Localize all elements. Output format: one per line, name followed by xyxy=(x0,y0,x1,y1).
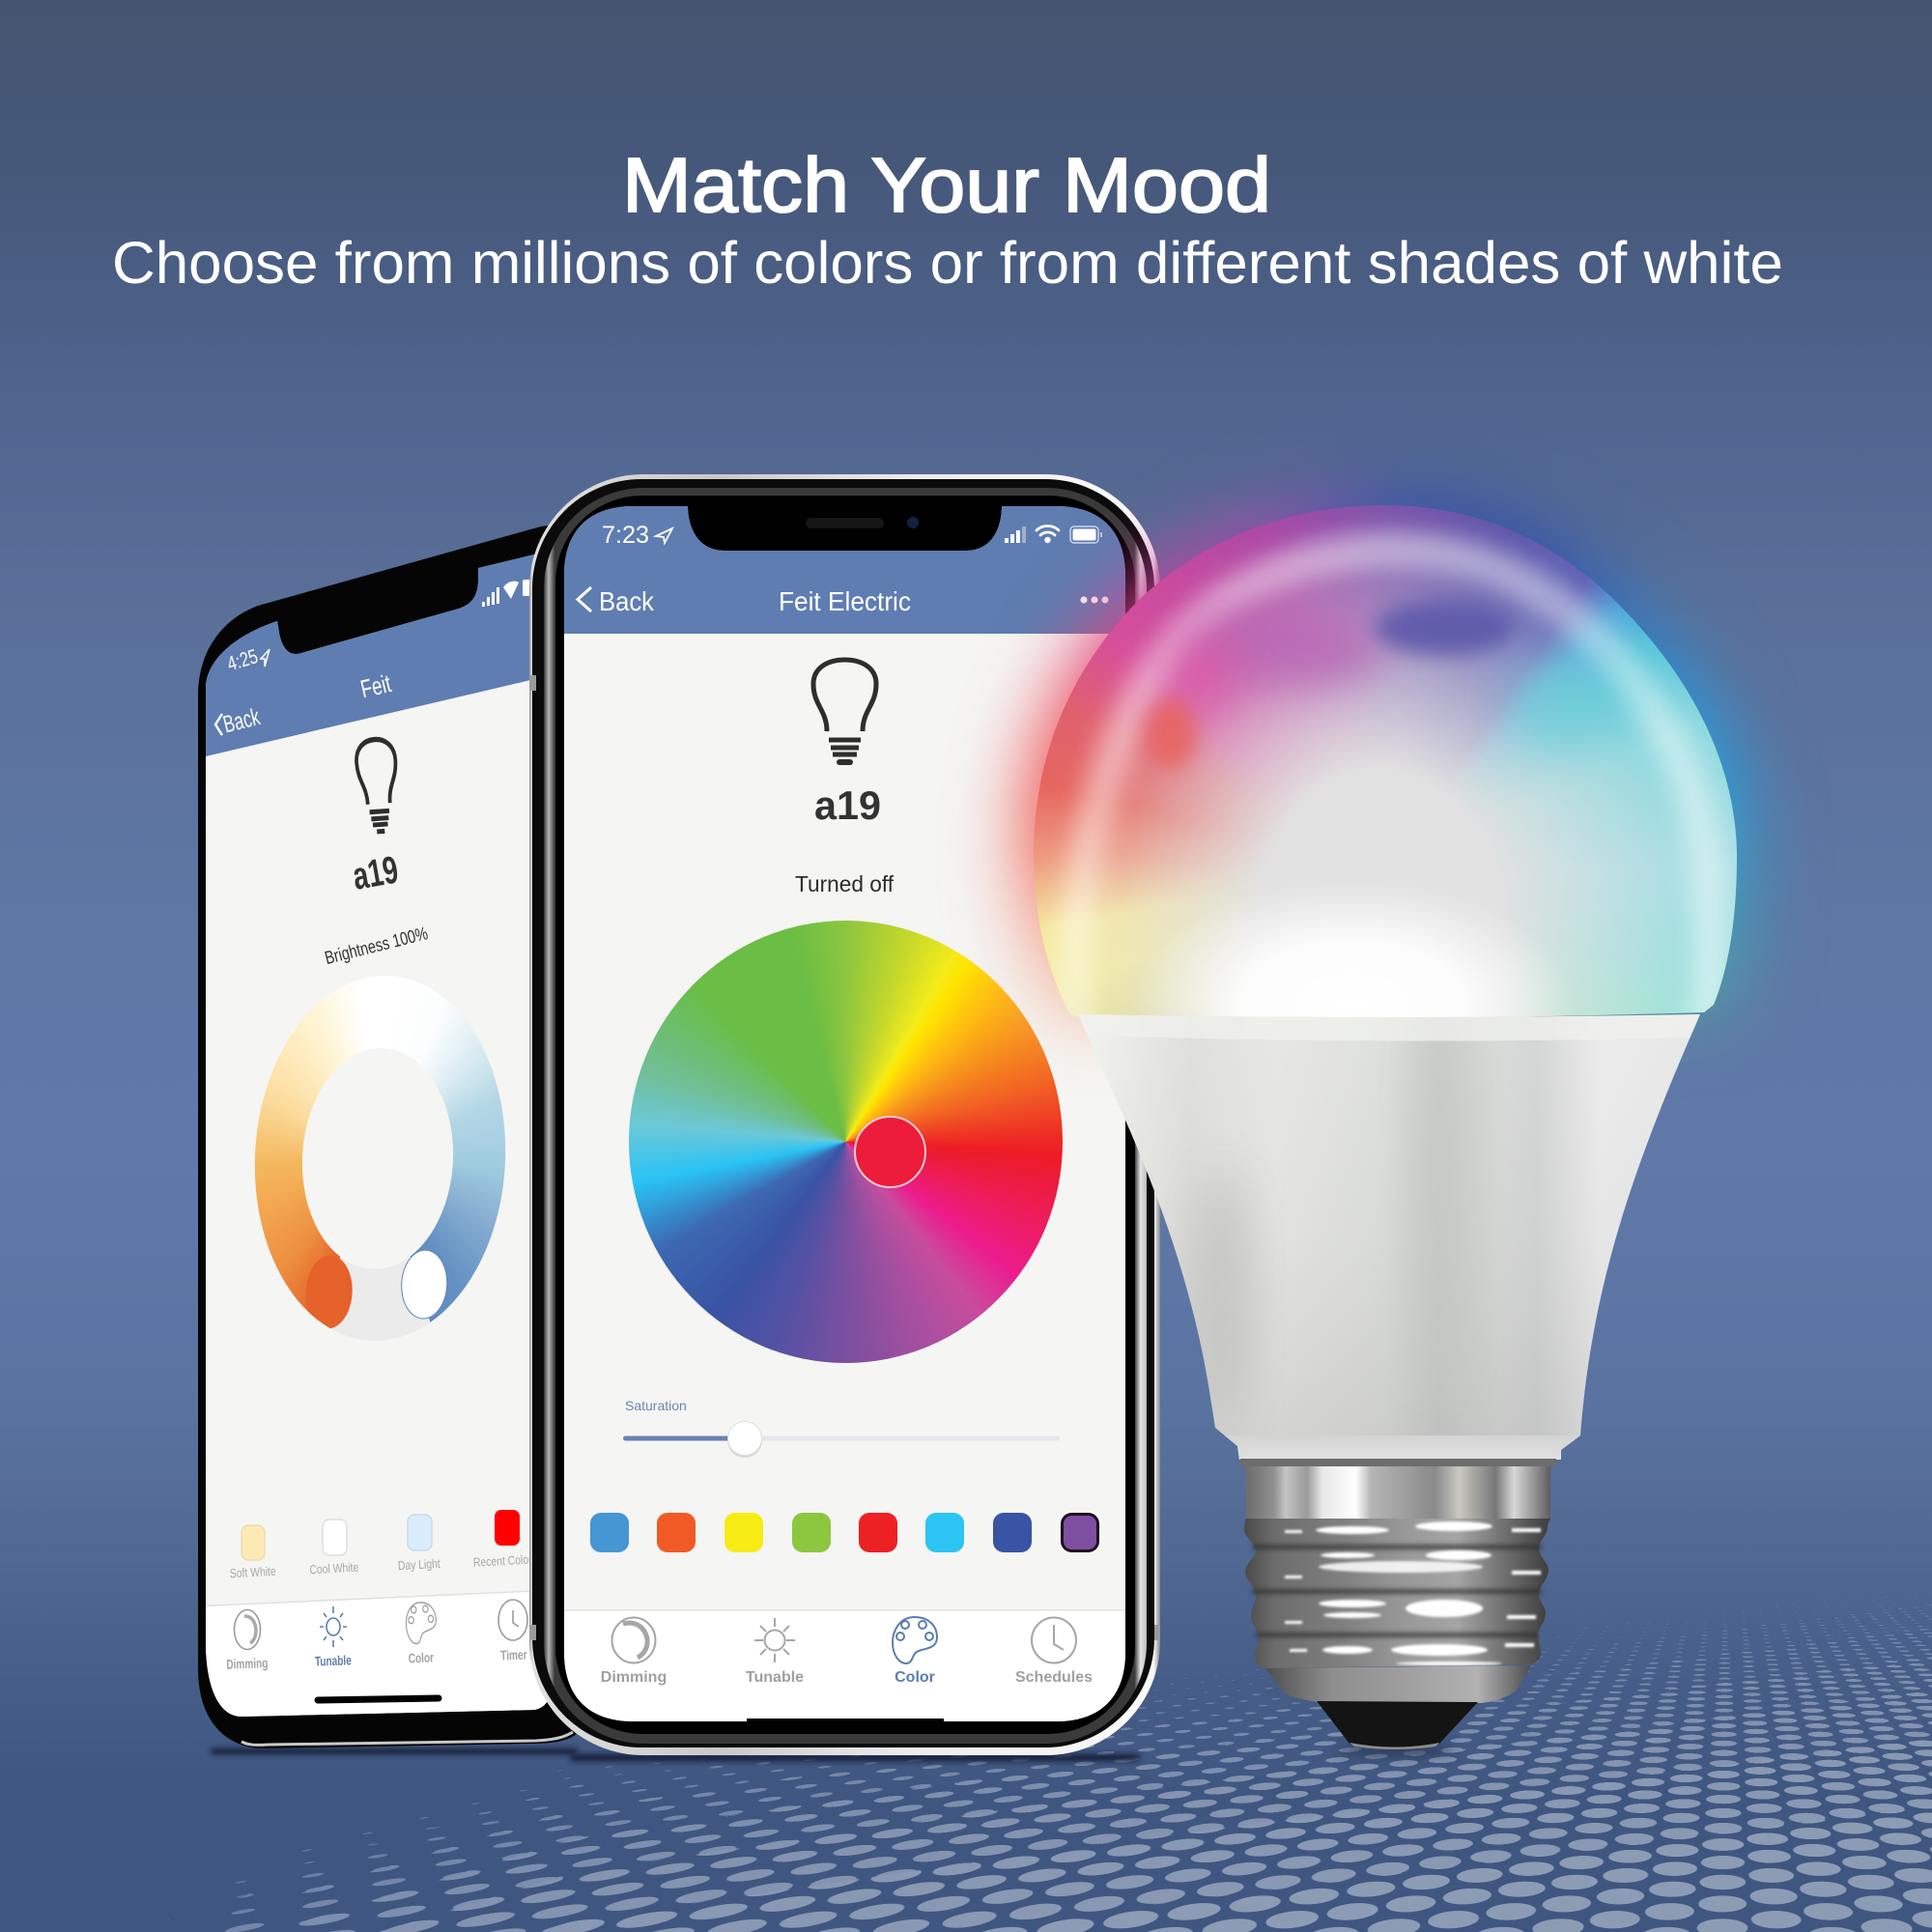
left back link: Back xyxy=(220,703,263,738)
thread grooves xyxy=(1252,1545,1542,1637)
tunable white ring xyxy=(245,969,515,1348)
tab icon: tunable xyxy=(754,1618,795,1662)
left preset labels: Day Light xyxy=(397,1557,441,1573)
ring handle xyxy=(399,1248,449,1321)
halftone dotted floor xyxy=(166,1589,1932,1932)
left phone body xyxy=(198,522,580,1748)
left preset labels xyxy=(230,1555,529,1578)
earpiece and camera xyxy=(806,517,919,528)
more dots xyxy=(1080,597,1109,603)
left tab labels xyxy=(226,1650,527,1671)
left home bar xyxy=(318,1698,439,1700)
left preset swatches xyxy=(242,1510,520,1560)
neck collar xyxy=(1072,1014,1705,1041)
screw base xyxy=(1240,1459,1556,1749)
phones artwork xyxy=(198,474,1160,1766)
tab icon: color xyxy=(893,1617,937,1663)
contact tip xyxy=(1317,1701,1478,1748)
left phone tab bar xyxy=(206,1592,547,1717)
left title: Feit xyxy=(357,668,394,703)
magenta patch xyxy=(1188,609,1381,686)
antenna bands xyxy=(530,675,1160,1640)
tab icon: schedules xyxy=(1032,1617,1076,1663)
left location arrow xyxy=(261,649,270,667)
neck shading xyxy=(1193,1169,1251,1420)
title: Match Your Mood xyxy=(622,142,1271,228)
left bulb icon xyxy=(355,738,400,833)
purple patch xyxy=(1375,601,1514,655)
saturation slider xyxy=(623,1422,1060,1458)
left status time: 4:25 xyxy=(224,644,261,675)
neck lower band xyxy=(1208,1435,1594,1464)
subtitle: Choose from millions of colors or from different shades of white xyxy=(112,230,1783,296)
base lower dome xyxy=(1265,1665,1531,1703)
status time: 7:23 xyxy=(602,522,649,549)
left device name: a19 xyxy=(350,849,402,898)
signal bars xyxy=(1005,526,1026,543)
left tab labels: Tunable xyxy=(315,1653,352,1669)
base collar xyxy=(1240,1459,1556,1467)
neck tone overlay xyxy=(1063,1014,1719,1461)
right phone screen xyxy=(564,506,1125,1721)
phone shadows xyxy=(211,1748,1140,1761)
base threads xyxy=(1244,1519,1550,1668)
back link xyxy=(578,586,655,616)
colour swatches xyxy=(590,1513,1097,1552)
base cylinder xyxy=(1246,1466,1550,1520)
thread highlights xyxy=(1285,1521,1541,1665)
tab labels: Schedules xyxy=(1015,1669,1093,1686)
left phone header xyxy=(206,554,535,756)
left speaker and camera xyxy=(351,590,427,622)
ring centre xyxy=(297,1044,459,1273)
saturation label: Saturation xyxy=(625,1398,687,1413)
battery icon xyxy=(1070,526,1102,543)
tab labels: Color xyxy=(895,1669,935,1686)
left tab labels: Color xyxy=(408,1650,434,1666)
pink patch xyxy=(1170,636,1236,717)
right phone header xyxy=(564,506,1125,634)
warm end cap xyxy=(304,1254,355,1330)
left preset labels: Soft White xyxy=(229,1565,277,1581)
right phone tab bar xyxy=(564,1609,1125,1721)
left chevron xyxy=(215,714,222,735)
tab labels xyxy=(601,1669,1093,1686)
cyan patch xyxy=(1507,657,1613,744)
bulb icon xyxy=(813,660,876,762)
header title: Feit Electric xyxy=(779,586,911,616)
left tab labels: Timer xyxy=(500,1647,527,1663)
back link: Back xyxy=(599,586,655,616)
left phone rim highlight xyxy=(242,1732,573,1745)
colour wheel xyxy=(629,921,1063,1363)
globe light patches xyxy=(1074,551,1711,1043)
location arrow xyxy=(656,528,672,543)
left tab labels: Dimming xyxy=(226,1656,269,1672)
right phone frame xyxy=(529,474,1160,1755)
colour wheel handle xyxy=(854,1116,926,1188)
left status icons xyxy=(482,580,530,607)
bulb neck xyxy=(1063,995,1719,1464)
left preset labels: Cool White xyxy=(309,1561,359,1577)
device name: a19 xyxy=(814,782,881,828)
left phone xyxy=(193,522,580,1748)
wifi icon xyxy=(1037,526,1059,542)
tab labels: Dimming xyxy=(601,1669,667,1686)
left phone screen xyxy=(193,541,560,1729)
red patch xyxy=(1146,699,1196,769)
tab labels: Tunable xyxy=(746,1669,804,1686)
left tab icons xyxy=(234,1600,527,1650)
tip shadow xyxy=(1338,1746,1454,1755)
brightness label: Brightness 100% xyxy=(323,923,430,969)
left preset labels: Recent Colors xyxy=(473,1552,537,1570)
pale inner band xyxy=(1074,551,1711,1043)
tab icon: dimming xyxy=(612,1617,655,1663)
right phone xyxy=(529,474,1160,1755)
status label: Turned off xyxy=(795,871,895,896)
